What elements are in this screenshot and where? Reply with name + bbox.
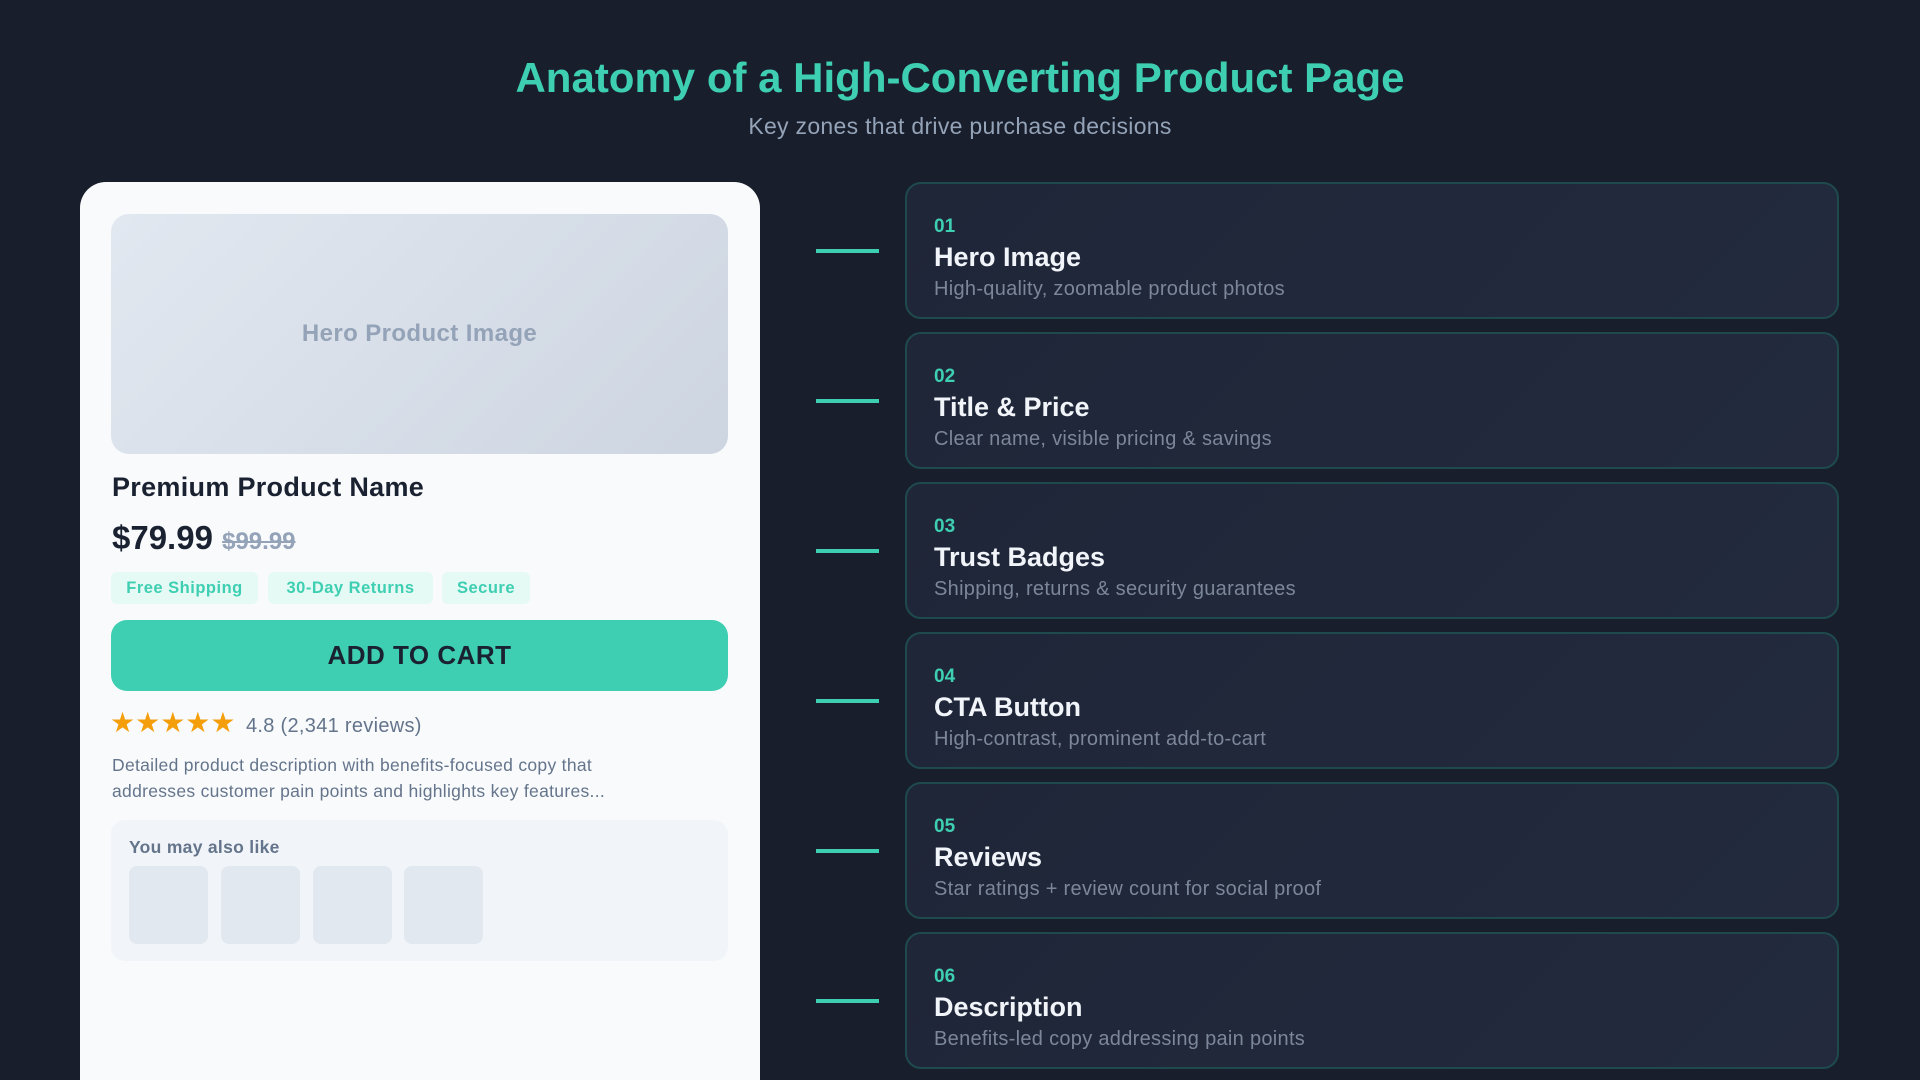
badge: secure [442, 572, 530, 604]
connector 05 [816, 849, 879, 853]
product description: Detailed product description with benefits-focused copy that addresses customer pain points and highlights key features... [112, 755, 605, 801]
card 06 [905, 932, 1839, 1069]
title: Anatomy of a High-Converting Product Page [515, 54, 1405, 101]
card 06: 06 [934, 966, 955, 987]
card 03: Trust Badges [934, 542, 1105, 572]
card 04: CTA Button [934, 692, 1081, 722]
card 01: High-quality, zoomable product photos [934, 278, 1285, 300]
related thumbnails [129, 866, 483, 944]
card 05: 05 [934, 816, 955, 837]
card 04: High-contrast, prominent add-to-cart [934, 728, 1266, 750]
card 06: Description [934, 992, 1083, 1022]
card 03: 03 [934, 516, 955, 537]
card 02 [905, 332, 1839, 469]
hero image placeholder [111, 214, 728, 454]
connector 02 [816, 399, 879, 403]
card 02: Title & Price [934, 392, 1090, 422]
star rating: ★★★★★ 4.8 (2,341 reviews) [110, 707, 422, 738]
subtitle: Key zones that drive purchase decisions [748, 113, 1172, 139]
connector 04 [816, 699, 879, 703]
product name: Premium Product Name [112, 472, 424, 502]
card 03: Shipping, returns & security guarantees [934, 578, 1296, 600]
add to cart button [111, 620, 728, 691]
card 05: Star ratings + review count for social proof [934, 878, 1321, 900]
badge: free shipping [111, 572, 258, 604]
price: $79.99 $99.99 [112, 519, 296, 556]
connector 06 [816, 999, 879, 1003]
badge: returns: 30-Day Returns [286, 579, 415, 597]
panel: product page mockup [80, 182, 760, 1080]
hero image placeholder: Hero Product Image [302, 320, 537, 347]
connector 03 [816, 549, 879, 553]
badge: free shipping: Free Shipping [126, 579, 243, 597]
related products [111, 820, 728, 961]
badge: secure: Secure [457, 579, 515, 597]
card 03 [905, 482, 1839, 619]
trust badges [111, 572, 530, 604]
card 02: 02 [934, 366, 955, 387]
badge: returns [268, 572, 433, 604]
connector 01 [816, 249, 879, 253]
card 05 [905, 782, 1839, 919]
card 06: Benefits-led copy addressing pain points [934, 1028, 1305, 1050]
card 02: Clear name, visible pricing & savings [934, 428, 1272, 450]
card 01: 01 [934, 216, 955, 237]
related heading: You may also like [129, 837, 280, 857]
card 04 [905, 632, 1839, 769]
card 04: 04 [934, 666, 955, 687]
add to cart button: ADD TO CART [327, 640, 512, 670]
card 01: Hero Image [934, 242, 1081, 272]
card 05: Reviews [934, 842, 1042, 872]
card 01 [905, 182, 1839, 319]
